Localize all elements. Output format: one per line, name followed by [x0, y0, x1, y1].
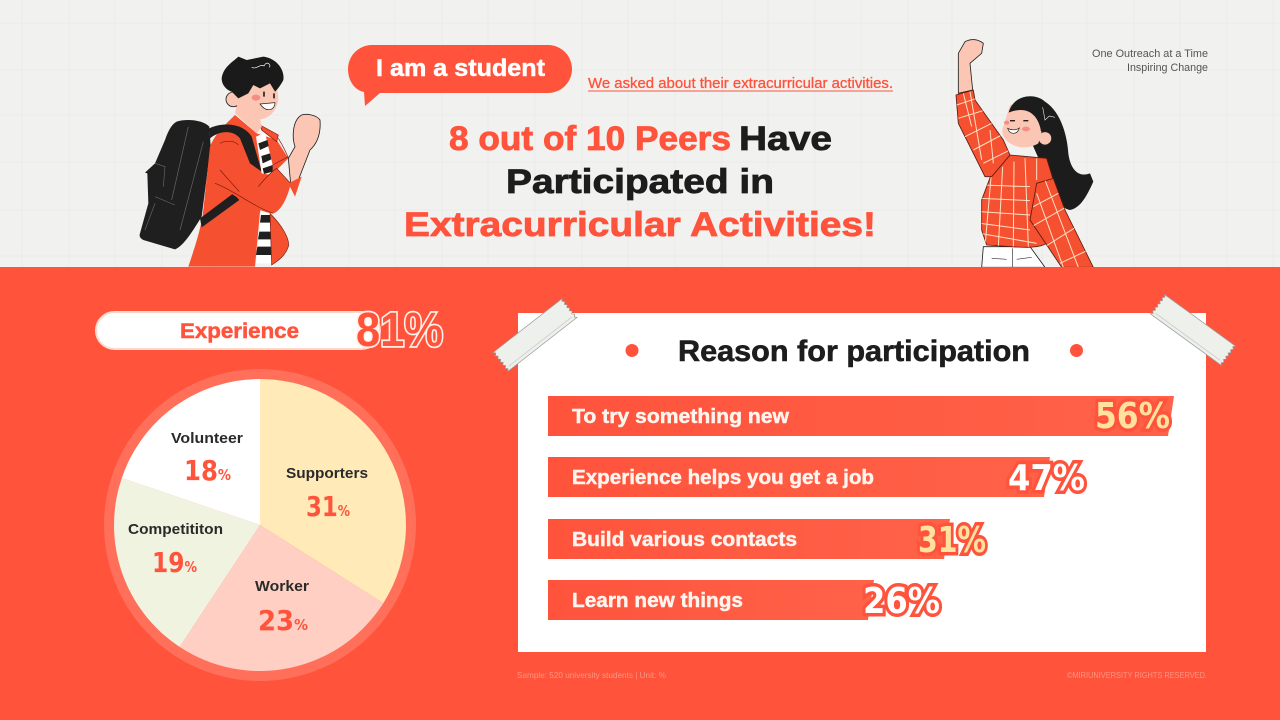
tape: right	[1150, 294, 1236, 366]
experience pill: Experience	[180, 320, 299, 343]
brand tagline	[1092, 48, 1208, 74]
panel: reason for participation	[518, 313, 1206, 652]
slice: worker	[180, 525, 383, 671]
pie chart	[104, 369, 416, 681]
title	[404, 120, 876, 244]
experience pill: 81%	[356, 304, 443, 357]
title: Participated in	[506, 163, 774, 201]
slice: supporters	[260, 379, 406, 603]
label: worker 23%: 23%	[258, 604, 308, 637]
title: 8 out of 10 Peers	[449, 120, 731, 158]
illustration: student with backpack	[140, 57, 320, 267]
slice: volunteer	[122, 379, 260, 525]
label: supporters 31%: 31%	[306, 490, 350, 523]
speech bubble: I am a student: I am a student	[376, 55, 545, 82]
footnote: sample: Sample: 520 university students | Unit: %	[517, 670, 666, 680]
speech bubble: I am a student	[348, 45, 572, 106]
heading: Reason for participation	[678, 335, 1030, 368]
bar: to try something new 56%	[548, 396, 1174, 437]
bar: learn new things 26%	[548, 580, 940, 622]
illustration: girl raising her arm	[956, 40, 1093, 267]
bar: learn new things 26%: 26%	[863, 581, 940, 622]
subtitle: We asked about their extracurricular activities.	[588, 76, 893, 92]
bar: to try something new 56%: To try something new	[572, 406, 789, 428]
title: Extracurricular Activities!	[404, 206, 876, 244]
label: supporters 31%	[286, 465, 368, 523]
label: competititon 19%	[128, 521, 223, 579]
bar: build various contacts 31%: Build various contacts	[572, 529, 797, 551]
label: competititon 19%: Competititon	[128, 521, 223, 538]
lower red panel	[0, 267, 1280, 720]
title: Have	[739, 120, 832, 158]
bar: to try something new 56%: 56%	[1095, 396, 1170, 437]
label: supporters 31%: Supporters	[286, 465, 368, 482]
label: volunteer 18%: Volunteer	[171, 430, 243, 447]
bar: experience helps you get a job 47%	[548, 457, 1085, 499]
bar: build various contacts 31%	[548, 519, 986, 561]
label: worker 23%: Worker	[255, 578, 309, 595]
footnote: copyright: ©MIRIUNIVERSITY RIGHTS RESERVED.	[1067, 670, 1207, 680]
bar: build various contacts 31%: 31%	[918, 520, 986, 561]
bar: learn new things 26%: Learn new things	[572, 590, 743, 612]
bar: experience helps you get a job 47%: 47%	[1008, 458, 1085, 499]
bar: experience helps you get a job 47%: Experience helps you get a job	[572, 467, 874, 489]
label: competititon 19%: 19%	[152, 546, 197, 579]
slice: competition	[114, 478, 260, 647]
label: worker 23%	[255, 578, 309, 637]
label: volunteer 18%	[171, 430, 243, 487]
tape: left	[493, 298, 577, 372]
label: volunteer 18%: 18%	[184, 454, 231, 487]
brand tagline: Inspiring Change	[1127, 62, 1208, 74]
experience pill	[96, 304, 443, 357]
brand tagline: One Outreach at a Time	[1092, 48, 1208, 60]
